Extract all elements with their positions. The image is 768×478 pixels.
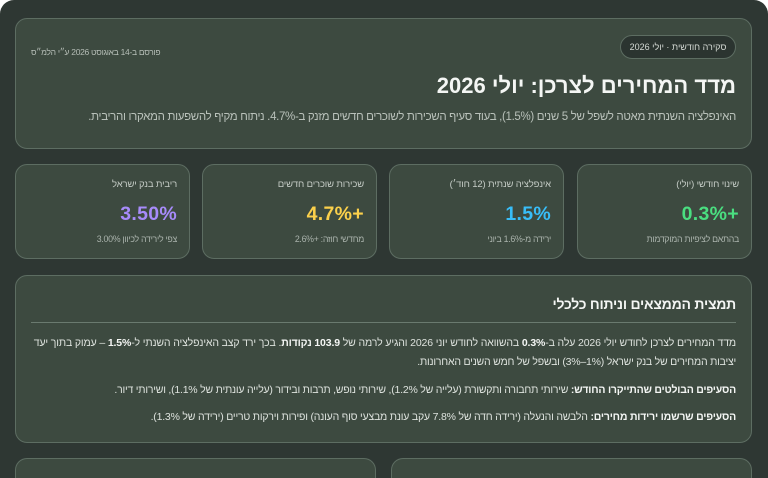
badge: monthly review: סקירה חודשית · יולי 2026 [630,42,726,52]
section heading: תמצית הממצאים וניתוח כלכלי [553,296,736,312]
card value: +0.3% [682,203,739,225]
publication date: פורסם ב-14 באוגוסט 2026 ע״י הלמ״ס [31,47,160,57]
card label: שינוי חודשי (יולי) [676,179,739,190]
card note: ירידה מ-1.6% ביוני [487,234,551,244]
panel: lower left [15,458,376,478]
card note: מחדשי חוזה: +2.6% [295,234,364,244]
card: new tenant rent [202,164,377,259]
title: מדד המחירים לצרכן: יולי 2026 [437,73,736,98]
card label: אינפלציה שנתית (12 חוד׳) [450,179,551,190]
card note: צפי לירידה לכיוון 3.00% [97,234,177,244]
card value: +4.7% [307,203,364,225]
card: annual inflation [389,164,564,259]
paragraph: price decreases: הסעיפים שרשמו ירידות מחירים: הלבשה והנעלה (ירידה חדה של 7.8% עקב עונת מבצעי סוף העונה) ופירות וירקות טריים (ירידה של 1.3%). [151,411,736,423]
panel: lower right [391,458,752,478]
paragraph: findings: מדד המחירים לצרכן לחודש יולי 2026 עלה ב-0.3% בהשוואה לחודש יוני 2026 והגיע לרמה של 103.9 נקודות. בכך ירד קצב האינפלציה השנתי ל-1.5% – עמוק בתוך יעד [34,337,736,349]
divider [31,322,736,323]
paragraph: price increases: הסעיפים הבולטים שהתייקרו החודש: שירותי תחבורה ותקשורת (עלייה של 1.2%), שירותי נופש, תרבות ובידור (עלייה עונתית של 1.1%), ושירותי דיור. [114,384,736,396]
badge: monthly review [620,35,736,59]
card: monthly change [577,164,752,259]
panel: summary and analysis [15,275,752,443]
subtitle: האינפלציה השנתית מאטה לשפל של 5 שנים (1.5%), בעוד סעיף השכירות לשוכרים חדשים מזנק ב-4.7%. ניתוח מקיף להשפעות המאקרו והריבית. [88,111,736,123]
paragraph: findings second line: יציבות המחירים של בנק ישראל (1%–3%) ובשפל של חמש השנים האחרונות. [417,356,736,368]
panel: header [15,18,752,149]
card: bank of israel rate [15,164,190,259]
card value: 1.5% [505,203,551,225]
card note: בהתאם לציפיות המוקדמות [647,234,739,244]
card value: 3.50% [120,203,177,225]
card label: שכירות שוכרים חדשים [278,179,364,190]
card label: ריבית בנק ישראל [112,179,177,190]
